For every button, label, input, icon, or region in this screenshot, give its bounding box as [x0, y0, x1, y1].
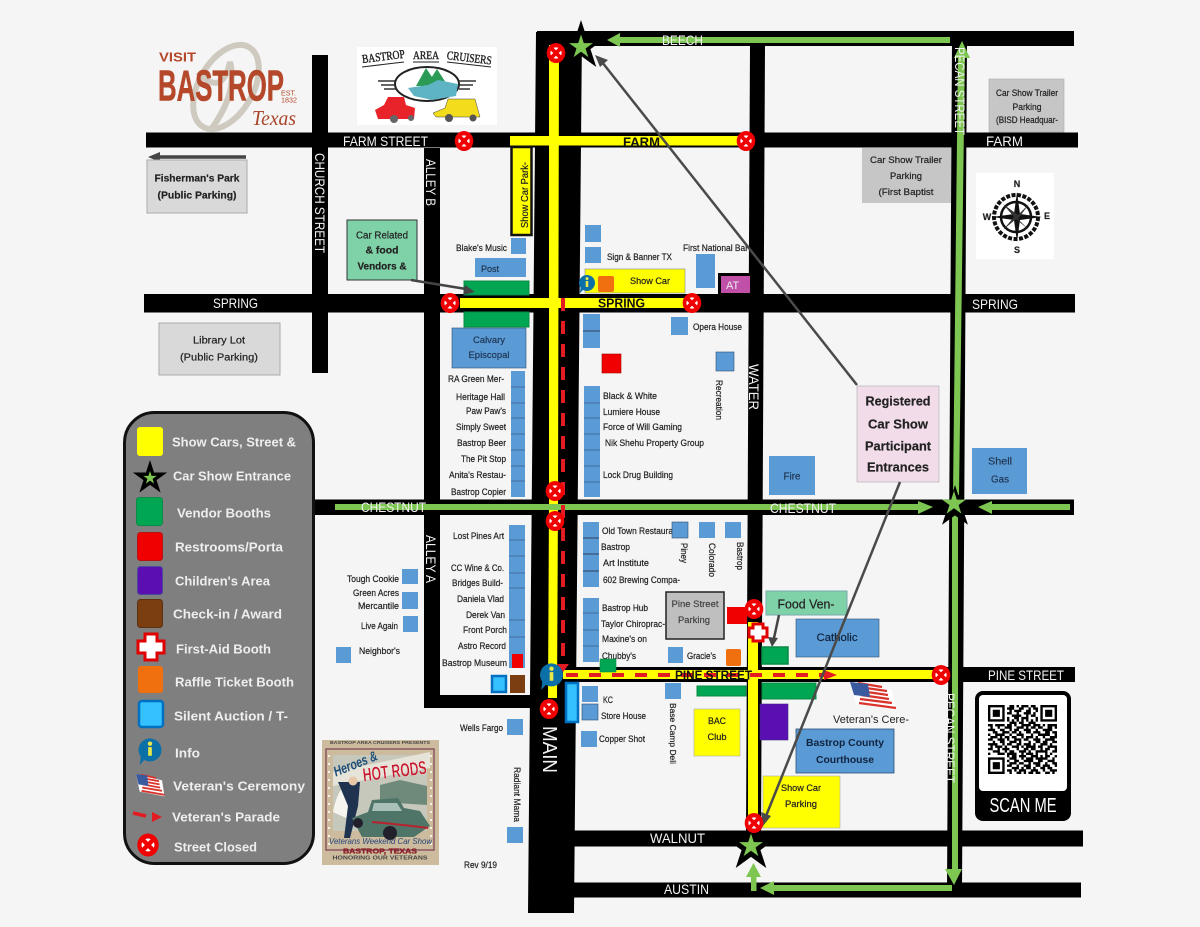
legend item: street closed: Street Closed: [174, 840, 257, 854]
block: Fire: Fire: [784, 472, 801, 482]
callout: car related vendors: Vendors &: [358, 262, 406, 272]
street label: Beech: BEECH: [662, 32, 703, 48]
block: BAC Club: Club: [708, 732, 726, 742]
legend item: vendor booths: Vendor Booths: [177, 506, 271, 520]
businesses column: Main west, Spring to Chestnut: Anita's Restau-: [449, 470, 506, 480]
businesses: east of Main, Spring to Chestnut: [583, 314, 742, 420]
icon: info at Main and Pine: [540, 663, 563, 690]
block: Bastrop County Courthouse: [796, 729, 894, 773]
businesses column: Main east, Chestnut to Pine lower: Taylor Chiroprac-: [601, 619, 665, 629]
businesses column: Main west, Spring to Chestnut: Heritage Hall: [456, 392, 505, 402]
block: Pine Street Parking: [666, 592, 724, 639]
legend item: silent auction: [139, 701, 288, 727]
businesses column: Main west, Spring to Chestnut: Simply Sweet: [456, 422, 506, 432]
block: Show Car Parking at Walnut: Parking: [785, 799, 817, 809]
street label: Pine Street on yellow: PINE STREET: [675, 668, 752, 682]
block: Car Show Trailer Parking BISD: [989, 79, 1064, 132]
legend item: car show entrance: [133, 460, 291, 493]
businesses column: Main east, Chestnut to Pine lower: [583, 598, 665, 662]
businesses: north-west of Main: [452, 238, 526, 368]
block: Shell Gas: Shell: [988, 456, 1012, 468]
entrance star: Beech: [556, 20, 606, 67]
businesses: north-east of Main, Farm to Spring: [585, 225, 748, 288]
vendor booths along Pine: [697, 683, 816, 699]
businesses: north-west of Main: Post: [481, 264, 499, 274]
street label: Chestnut east: CHESTNUT: [770, 500, 836, 516]
legend item: info: Info: [175, 746, 200, 760]
children's area: [760, 704, 788, 740]
street label: Church Street: CHURCH STREET: [312, 153, 328, 253]
businesses column: Main west, Chestnut to Pine: Lost Pines Art: [453, 531, 504, 541]
poster: Heroes and Hot Rods: Veterans Weekend Car Show: [329, 836, 433, 846]
street label: Water: WATER: [746, 364, 762, 410]
street label: Alley A: ALLEY A: [423, 535, 439, 584]
businesses: Wells Fargo and Radiant Mama: Wells Fargo: [460, 723, 503, 733]
businesses column: Main west, Chestnut to Pine: Bastrop Museum: [442, 658, 507, 668]
green route: Pecan down arrow: [945, 515, 962, 885]
block: Show Car Parking at Walnut: Show Car: [781, 783, 821, 793]
businesses column: Main east, Spring to Chestnut: Force of Will Gaming: [603, 422, 682, 432]
check-in award booth: [510, 675, 525, 693]
businesses column: Main east, Chestnut to Pine upper: Art Institute: [603, 558, 649, 568]
legend item: show cars: Show Cars, Street &: [172, 434, 296, 450]
legend item: children's area: [138, 566, 271, 594]
businesses: west of Alley A: Live Again: [361, 621, 398, 631]
logo: Bastrop Area Cruisers: AREA: [413, 48, 439, 62]
arrow: vendors pointer: [411, 280, 475, 295]
silent auction booth near museum: [492, 676, 506, 692]
QR code panel: [975, 691, 1071, 821]
businesses: Wells Fargo and Radiant Mama: [460, 719, 523, 843]
legend item: children's area: Children's Area: [175, 574, 271, 588]
street label: Chestnut west: CHESTNUT: [361, 499, 426, 515]
callout: registered car show participant entrances: Registered: [866, 394, 931, 408]
businesses column: Main west, Chestnut to Pine: Derek Van: [466, 610, 505, 620]
raffle booth at Pine: [726, 649, 741, 666]
note: Fisherman's Park parking: Fisherman's Park: [154, 174, 240, 184]
street label: Spring on yellow: SPRING: [598, 296, 645, 310]
legend item: restrooms: [138, 532, 284, 560]
businesses column: Main west, Chestnut to Pine: Daniela Vlad: [457, 594, 504, 604]
street label: Austin: AUSTIN: [664, 881, 709, 897]
legend item: first aid: First-Aid Booth: [176, 642, 271, 656]
businesses column: Main east, Chestnut to Pine upper: Old Town Restaura: [602, 526, 673, 536]
businesses column: Main east, Chestnut to Pine lower: Chubby's: [602, 651, 636, 661]
businesses column: Main east, Chestnut to Pine upper: 602 Brewing Compa-: [603, 575, 680, 585]
logo: Visit Bastrop: VISIT: [159, 50, 196, 64]
legend item: veteran's ceremony: Veteran's Ceremony: [173, 778, 306, 794]
street label: Spring east: SPRING: [972, 296, 1018, 312]
note: Library Lot parking: (Public Parking): [180, 352, 258, 364]
businesses: north-west of Main: Calvary: [473, 335, 506, 345]
block: Shell Gas: Gas: [991, 474, 1009, 486]
vendor booths: Spring Street: [464, 281, 529, 327]
businesses: Piney, Colorado, Bastrop: Piney: [679, 543, 689, 563]
icon: compass: S: [1014, 245, 1020, 255]
businesses: Wells Fargo and Radiant Mama: Radiant Mama: [512, 767, 522, 822]
street label: Main: MAIN: [538, 726, 560, 773]
businesses: Piney, Colorado, Bastrop: Colorado: [707, 543, 717, 577]
legend item: restrooms: Restrooms/Porta: [175, 540, 284, 554]
block: Car Show Trailer Parking First Baptist: Parking: [890, 171, 922, 181]
businesses: south of Pine, Main east: Base Camp Deli: [668, 703, 678, 764]
block: Bastrop County Courthouse: Courthouse: [816, 754, 874, 766]
revision note: Rev 9/19: [464, 860, 497, 870]
block: Car Show Trailer Parking BISD: Car Show Trailer: [996, 88, 1058, 98]
street label: Pine Street east: PINE STREET: [988, 667, 1064, 683]
businesses column: Main west, Spring to Chestnut: RA Green Mer-: [448, 374, 504, 384]
businesses column: Main west, Chestnut to Pine: CC Wine & Co.: [451, 563, 504, 573]
block: Car Show Trailer Parking BISD: Parking: [1012, 102, 1042, 112]
food vendor booth: [762, 647, 788, 664]
green route: Chestnut arrow east: [335, 501, 933, 514]
restroom at Water and Pine: [727, 607, 747, 624]
legend item: veteran's ceremony: [136, 774, 306, 796]
legend item: veteran's parade: Veteran's Parade: [172, 810, 280, 824]
businesses: west of Alley A: [336, 569, 418, 663]
business: Gracie's: Gracie's: [687, 651, 716, 661]
icon: compass: [976, 173, 1054, 259]
logo: Bastrop Area Cruisers: CRUISERS: [446, 48, 493, 67]
block: Bastrop County Courthouse: Bastrop County: [806, 737, 884, 749]
street label: Alley B: ALLEY B: [423, 159, 439, 206]
businesses: north-west of Main: Episcopal: [468, 350, 510, 360]
businesses column: Main east, Chestnut to Pine upper: Bastrop: [601, 542, 630, 552]
QR code panel: SCAN ME: [990, 795, 1056, 817]
block: Catholic: [796, 619, 879, 657]
silent auction long booth: [566, 683, 578, 722]
block: Pine Street Parking: Pine Street: [672, 599, 719, 609]
parade dashed route: [557, 298, 837, 680]
businesses: north-east of Main, Farm to Spring: Sign & Banner TX: [607, 252, 672, 262]
businesses column: Main east, Spring to Chestnut: Lumiere House: [603, 407, 660, 417]
legend item: info: [138, 738, 200, 765]
note: Fisherman's Park parking: (Public Parking): [158, 190, 236, 202]
block: Catholic: Catholic: [816, 632, 858, 644]
logo: Bastrop Area Cruisers: BASTROP: [361, 47, 406, 66]
legend item: show cars: [137, 427, 296, 456]
block: Shell Gas: [972, 448, 1027, 494]
block: BAC Club: [694, 709, 740, 756]
street grid: [144, 31, 1083, 913]
businesses: north-east of Main, Farm to Spring: First National Bar: [683, 243, 748, 253]
legend item: silent auction: Silent Auction / T-: [174, 708, 288, 724]
logo: Visit Bastrop: [158, 34, 297, 140]
street label: Farm Street: FARM STREET: [343, 133, 428, 149]
block: Pine Street Parking: Parking: [678, 615, 710, 625]
businesses: east of Main, Spring to Chestnut: Recreation: [714, 380, 724, 420]
logo: Bastrop Area Cruisers: [357, 47, 497, 125]
businesses: west of Alley A: Green Acres: [353, 588, 399, 598]
legend item: check-in award: Check-in / Award: [173, 606, 282, 622]
icon: veteran's flag: [850, 682, 896, 710]
green route: Pecan up arrow: [953, 41, 970, 495]
legend item: car show entrance: Car Show Entrance: [173, 468, 291, 484]
businesses column: Main east, Spring to Chestnut: Nik Shehu Property Group: [605, 438, 704, 448]
street label: Walnut: WALNUT: [650, 830, 705, 846]
businesses column: Main east, Spring to Chestnut: Lock Drug Building: [603, 470, 673, 480]
businesses column: Main east, Chestnut to Pine lower: Maxine's on: [602, 634, 647, 644]
callout: food vendors: [766, 591, 847, 615]
entrance star: Walnut: [726, 821, 776, 868]
legend item: raffle: [138, 666, 294, 693]
business: Gracie's: [668, 647, 716, 663]
street closed markers: [441, 43, 950, 833]
businesses column: Main west, Chestnut to Pine: Bridges Build-: [452, 578, 503, 588]
businesses: Piney, Colorado, Bastrop: Bastrop: [735, 542, 745, 570]
restroom near Spring: [602, 354, 621, 373]
businesses: south of Pine, Main east: Store House: [601, 711, 646, 721]
businesses: east of Main, Spring to Chestnut: Opera House: [693, 322, 742, 332]
callout: registered car show participant entrances: Entrances: [867, 460, 929, 474]
logo: Visit Bastrop: Texas: [252, 106, 296, 130]
businesses: north-west of Main: Blake's Music: [456, 243, 507, 253]
note: Library Lot parking: Library Lot: [193, 336, 245, 346]
poster: Heroes and Hot Rods: HONORING OUR VETERANS: [332, 856, 428, 862]
businesses column: Main east, Spring to Chestnut: [584, 386, 704, 497]
legend item: first aid: [138, 634, 271, 660]
businesses column: Main east, Chestnut to Pine lower: Bastrop Hub: [602, 603, 648, 613]
legend item: vendor booths: [136, 498, 271, 526]
businesses column: Main west, Spring to Chestnut: Bastrop Copier: [451, 487, 506, 497]
logo: Visit Bastrop: BASTROP: [158, 62, 284, 110]
arrow: to Beech entrance: [595, 55, 857, 385]
businesses column: Main west, Chestnut to Pine: Front Porch: [463, 625, 507, 635]
businesses: west of Alley A: Mercantile: [358, 601, 399, 611]
businesses column: Main east, Chestnut to Pine upper: [583, 522, 680, 587]
block: Show Car Parking on Farm: Show Car Park-: [519, 162, 531, 228]
businesses column: Main west, Spring to Chestnut: The Pit Stop: [461, 454, 506, 464]
businesses: south of Pine, Main east: KC: [603, 695, 613, 705]
businesses column: Main west, Chestnut to Pine: [442, 525, 525, 668]
green route: Beech arrow: [607, 33, 950, 47]
icon: compass: N: [1014, 179, 1020, 189]
block: Fire: [769, 456, 815, 495]
green route: up arrow to Walnut entrance: [746, 863, 761, 891]
block: Car Show Trailer Parking First Baptist: [862, 148, 951, 203]
raffle ticket booth: [598, 276, 614, 292]
businesses: south of Pine, Main east: [581, 683, 681, 764]
icon: compass: E: [1044, 211, 1050, 221]
icon: first aid booth: [749, 624, 767, 641]
businesses column: Main west, Spring to Chestnut: [448, 371, 525, 497]
legend item: raffle: Raffle Ticket Booth: [175, 674, 294, 690]
callout: registered car show participant entrances: [857, 386, 939, 482]
businesses column: Main east, Spring to Chestnut: Black & White: [603, 391, 657, 401]
callout: car related vendors: [347, 220, 417, 280]
block: Car Show Trailer Parking First Baptist: Car Show Trailer: [870, 155, 942, 165]
block: Show Car Parking on Farm: [512, 147, 532, 235]
callout: car related vendors: Car Related: [356, 230, 408, 242]
logo: Visit Bastrop: EST.: [281, 90, 296, 98]
callout: car related vendors: & food: [366, 246, 398, 256]
icon: info at Spring: [579, 275, 595, 293]
street label: Farm on yellow: FARM: [623, 134, 660, 150]
arrow: to Walnut entrance: [761, 482, 900, 826]
green route: Austin arrow west: [760, 881, 952, 895]
note: Fisherman's Park parking: [147, 152, 247, 213]
poster: Heroes and Hot Rods: HOT RODS: [362, 758, 428, 786]
businesses: west of Alley A: Tough Cookie: [347, 574, 399, 584]
businesses: south of Pine, Main east: Copper Shot: [599, 734, 645, 744]
callout: registered car show participant entrances: Participant: [865, 438, 932, 454]
poster: Heroes and Hot Rods: BASTROP AREA CRUISERS PRESENTS: [330, 740, 430, 745]
businesses column: Main west, Spring to Chestnut: Paw Paw's: [466, 406, 506, 416]
businesses: Piney, Colorado, Bastrop: [672, 522, 745, 577]
logo: Visit Bastrop: 1832: [281, 98, 297, 104]
callout: registered car show participant entrances: Car Show: [868, 416, 929, 432]
icon: compass: W: [983, 212, 992, 222]
businesses: west of Alley A: Neighbor's: [359, 646, 400, 656]
legend panel: [124, 412, 314, 864]
poster: Heroes and Hot Rods: [322, 740, 439, 865]
block: AT: [718, 273, 751, 294]
block: BAC Club: BAC: [708, 716, 726, 726]
block: Show Car on Spring: [585, 269, 685, 293]
entrance star: Chestnut and Pecan: [934, 485, 976, 525]
businesses column: Main west, Spring to Chestnut: Bastrop Beer: [457, 438, 506, 448]
arrow: food vendors pointer: [768, 615, 779, 647]
businesses column: Main west, Chestnut to Pine: Astro Record: [458, 641, 506, 651]
block: Show Car on Spring: Show Car: [630, 276, 670, 286]
block: Show Car Parking at Walnut: [763, 776, 840, 828]
legend item: check-in award: [138, 600, 282, 628]
label: Veteran's ceremony: Veteran's Cere-: [833, 714, 909, 726]
block: Car Show Trailer Parking First Baptist: (First Baptist: [878, 187, 934, 197]
block: Car Show Trailer Parking BISD: (BISD Headquar-: [996, 115, 1058, 125]
street label: Spring west: SPRING: [213, 295, 258, 311]
vendor booth near Chubby's: [600, 659, 616, 672]
street label: Pecan Street north: PECAN STREET: [952, 47, 968, 135]
street label: Pecan Street south: PECAN STREET: [942, 693, 958, 783]
poster: Heroes and Hot Rods: BASTROP, TEXAS: [343, 846, 417, 856]
legend item: street closed: [137, 834, 257, 856]
street label: Farm east: FARM: [986, 133, 1023, 149]
note: Library Lot parking: [159, 323, 280, 375]
block: AT: AT: [726, 280, 740, 292]
green route: Chestnut arrow west: [978, 501, 1070, 514]
callout: food vendors: Food Ven-: [778, 596, 834, 612]
poster: Heroes and Hot Rods: Heroes &: [331, 747, 380, 779]
closed street segments in yellow: [460, 45, 938, 826]
